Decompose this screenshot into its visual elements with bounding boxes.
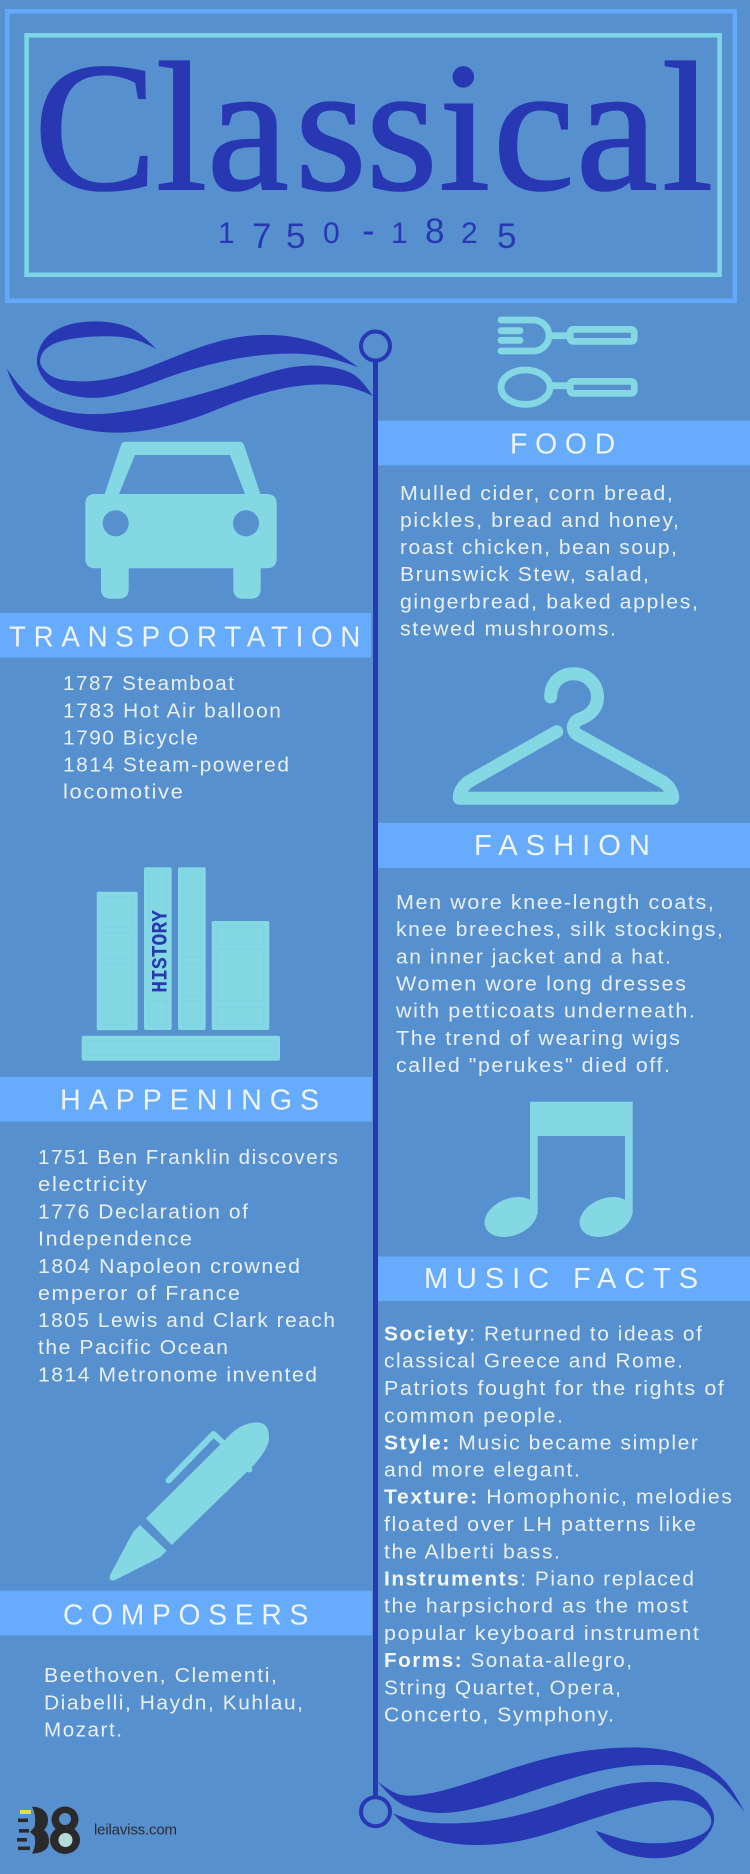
text: music facts: Instruments : Piano replaced [384, 1569, 695, 1591]
text: music facts: floated over LH patterns like [384, 1514, 698, 1536]
text: music facts: the harpsichord as the most [384, 1596, 690, 1618]
text: music facts [384, 1323, 734, 1727]
text: happenings list [38, 1147, 340, 1387]
icon: pen [110, 1422, 269, 1581]
text: happenings list: 1776 Declaration of [38, 1202, 249, 1224]
heading band: composers [0, 1591, 372, 1635]
text: transportation list [63, 673, 290, 804]
panel: transportation [0, 442, 371, 804]
text: music facts: and more elegant. [384, 1460, 582, 1482]
text: music facts: the Alberti bass. [384, 1541, 562, 1563]
text: music facts: Style: Music became simpler [384, 1433, 700, 1455]
panel: composers [0, 1422, 372, 1741]
text: happenings list: 1805 Lewis and Clark reach [38, 1310, 337, 1332]
text: happenings list: the Pacific Ocean [38, 1337, 230, 1359]
date range: 2 [461, 217, 478, 250]
title block [7, 11, 735, 301]
text: happenings list: emperor of France [38, 1283, 242, 1305]
text: food: Brunswick Stew, salad, [400, 564, 650, 586]
text: music facts: Texture: Homophonic, melodies [384, 1487, 734, 1509]
text: fashion [395, 892, 724, 1077]
heading: food: FOOD [510, 428, 623, 460]
date range: - [362, 210, 375, 252]
text: composers: Beethoven, Clementi, [44, 1665, 278, 1687]
website: leilaviss.com [94, 1822, 177, 1839]
panel: fashion [378, 674, 750, 1077]
heading band: music facts [378, 1256, 750, 1301]
date range: 8 [425, 212, 444, 251]
text: transportation list: 1783 Hot Air balloon [63, 700, 282, 722]
text: happenings list: Independence [38, 1228, 194, 1250]
text: food [400, 483, 700, 640]
heading band: food [378, 421, 750, 465]
text: happenings list: 1751 Ben Franklin discovers [38, 1147, 340, 1169]
text: composers: Mozart. [44, 1719, 124, 1741]
text: music facts: String Quartet, Opera, [384, 1677, 622, 1699]
text: fashion: Men wore knee-length coats, [396, 892, 716, 914]
heading band: happenings [0, 1077, 372, 1122]
text: fashion: The trend of wearing wigs [396, 1028, 682, 1050]
logo: 38 leilaviss.com [17, 1806, 177, 1854]
text: transportation list: 1814 Steam-powered [63, 755, 290, 777]
icon: 38 mark [17, 1806, 80, 1854]
icon: car [85, 442, 277, 599]
heading: fashion: FASHION [474, 830, 658, 862]
text: transportation list: 1787 Steamboat [63, 673, 236, 695]
icon: music notes [479, 1102, 638, 1244]
text: fashion: with petticoats underneath. [395, 1001, 696, 1023]
text: transportation list: 1790 Bicycle [63, 728, 200, 750]
heading band: fashion [378, 823, 750, 868]
inner frame [27, 35, 720, 275]
panel: happenings [0, 867, 372, 1387]
bottom flourish [378, 1747, 745, 1858]
date range: 7 [252, 217, 271, 256]
heading band: transportation [0, 613, 371, 658]
date range: 1 [218, 217, 235, 250]
text: fashion: knee breeches, silk stockings, [396, 919, 724, 941]
panel: food [378, 320, 750, 640]
text: food: Mulled cider, corn bread, [400, 483, 674, 505]
text: music facts: Concerto, Symphony. [384, 1705, 616, 1727]
text: food: stewed mushrooms. [400, 618, 618, 640]
text: food: roast chicken, bean soup, [400, 537, 678, 559]
panel: music facts [378, 1102, 750, 1727]
date range: 1 [391, 217, 408, 250]
text: music facts: popular keyboard instrument [384, 1623, 700, 1645]
title: Classical [34, 25, 713, 229]
text: music facts: Society: Returned to ideas of [384, 1323, 704, 1345]
text: happenings list: electricity [38, 1174, 148, 1196]
book spine label: HISTORY [148, 909, 174, 993]
outer frame [7, 11, 735, 301]
top flourish [7, 321, 373, 433]
text: happenings list: 1804 Napoleon crowned [38, 1256, 302, 1278]
text: composers: Diabelli, Haydn, Kuhlau, [44, 1692, 304, 1714]
icon: coat hanger [459, 674, 673, 798]
heading: happenings: HAPPENINGS [60, 1085, 327, 1117]
text: fashion: called "perukes" died off. [396, 1055, 672, 1077]
timeline pole [361, 332, 390, 1826]
text: music facts: Patriots fought for the rights of [384, 1378, 726, 1400]
icon: fork and spoon [501, 320, 634, 404]
date range: 0 [323, 217, 340, 250]
text: food: gingerbread, baked apples, [400, 591, 700, 613]
icon: books [82, 867, 280, 1061]
text: music facts: Forms: Sonata-allegro, [384, 1650, 634, 1672]
text: fashion: Women wore long dresses [396, 974, 688, 996]
text: happenings list: 1814 Metronome invented [38, 1365, 318, 1387]
date range: 5 [497, 217, 516, 256]
text: music facts: classical Greece and Rome. [384, 1351, 684, 1373]
text: food: pickles, bread and honey, [400, 510, 680, 532]
text: transportation list: locomotive [63, 782, 184, 804]
text: composers [44, 1665, 304, 1741]
heading: composers: COMPOSERS [63, 1599, 316, 1631]
heading: music facts: MUSIC FACTS [424, 1263, 706, 1295]
date range: 5 [286, 217, 305, 256]
heading: transportation: TRANSPORTATION [9, 622, 368, 654]
text: fashion: an inner jacket and a hat. [396, 946, 672, 968]
text: music facts: common people. [384, 1405, 564, 1427]
